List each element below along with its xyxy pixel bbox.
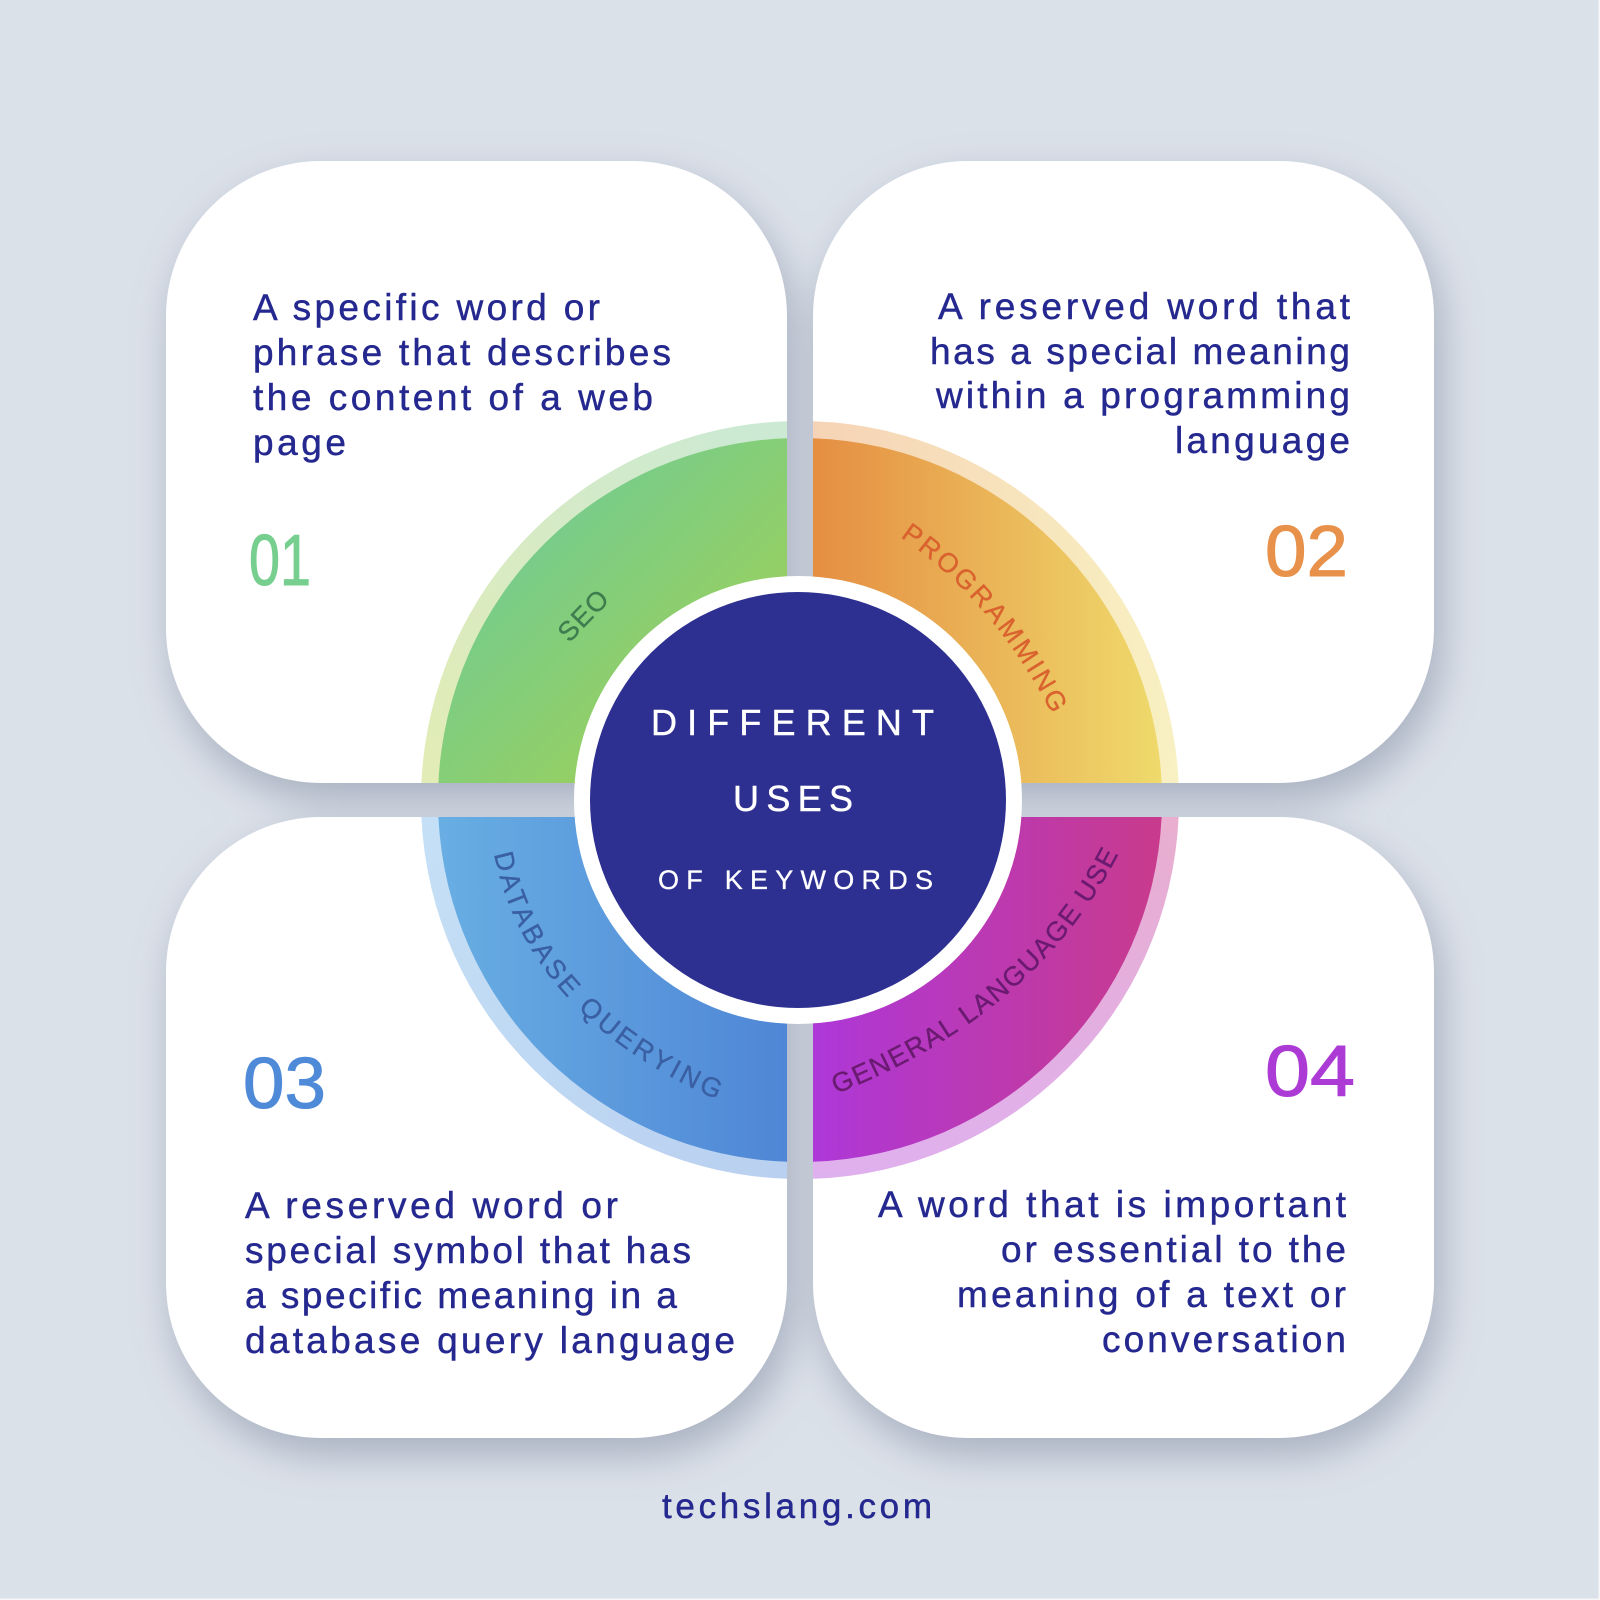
segment: SEO — [421, 421, 787, 783]
card 04 description: meaning of a text or — [957, 1274, 1346, 1315]
card 04 description: A word that is important — [878, 1184, 1347, 1225]
card 02 description — [930, 286, 1351, 461]
label: SEO: SEO — [559, 592, 606, 640]
card 04 description — [878, 1184, 1347, 1360]
panel: card 03 Database querying — [166, 817, 787, 1438]
card 01 description: the content of a web — [253, 377, 653, 418]
card 02 description: has a special meaning — [930, 331, 1350, 372]
card 02 description: within a programming — [935, 375, 1350, 416]
segment: General language use — [813, 817, 1179, 1179]
card 04 description: or essential to the — [1001, 1229, 1346, 1270]
number 03: 03 — [243, 1044, 326, 1124]
card 03 description: special symbol that has — [245, 1230, 691, 1271]
card 02 description: A reserved word that — [938, 286, 1351, 327]
card 01 description: page — [253, 422, 346, 463]
card 03 description: a specific meaning in a — [245, 1275, 677, 1316]
card 03 description: A reserved word or — [245, 1185, 618, 1226]
title: Uses: USES — [733, 778, 853, 819]
label: General language use: GENERAL LANGUAGE USE — [832, 846, 1118, 1092]
center circle with title — [574, 576, 1022, 1024]
number 02: 02 — [1265, 512, 1348, 592]
panel: card 01 SEO — [166, 161, 787, 783]
number 01: 01 — [249, 521, 311, 601]
card 01 description: A specific word or — [253, 287, 600, 328]
subtitle: of keywords: OF KEYWORDS — [658, 865, 933, 895]
panel: card 02 Programming — [813, 161, 1434, 783]
card 03 description — [245, 1185, 735, 1361]
segment: Programming — [813, 421, 1179, 783]
panel: card 04 General language use — [813, 817, 1434, 1438]
card 01 description — [253, 287, 671, 463]
title: Different: DIFFERENT — [651, 702, 934, 743]
card 03 description: database query language — [245, 1320, 735, 1361]
card 01 description: phrase that describes — [253, 332, 671, 373]
card 04 description: conversation — [1102, 1319, 1346, 1360]
segment: Database querying — [421, 817, 787, 1179]
number 04: 04 — [1265, 1032, 1355, 1112]
label: Programming: PROGRAMMING — [902, 523, 1066, 712]
card 02 description: language — [1175, 420, 1350, 461]
label: Database querying: DATABASE QUERYING — [494, 852, 721, 1097]
footer: website: techslang.com — [662, 1487, 932, 1526]
